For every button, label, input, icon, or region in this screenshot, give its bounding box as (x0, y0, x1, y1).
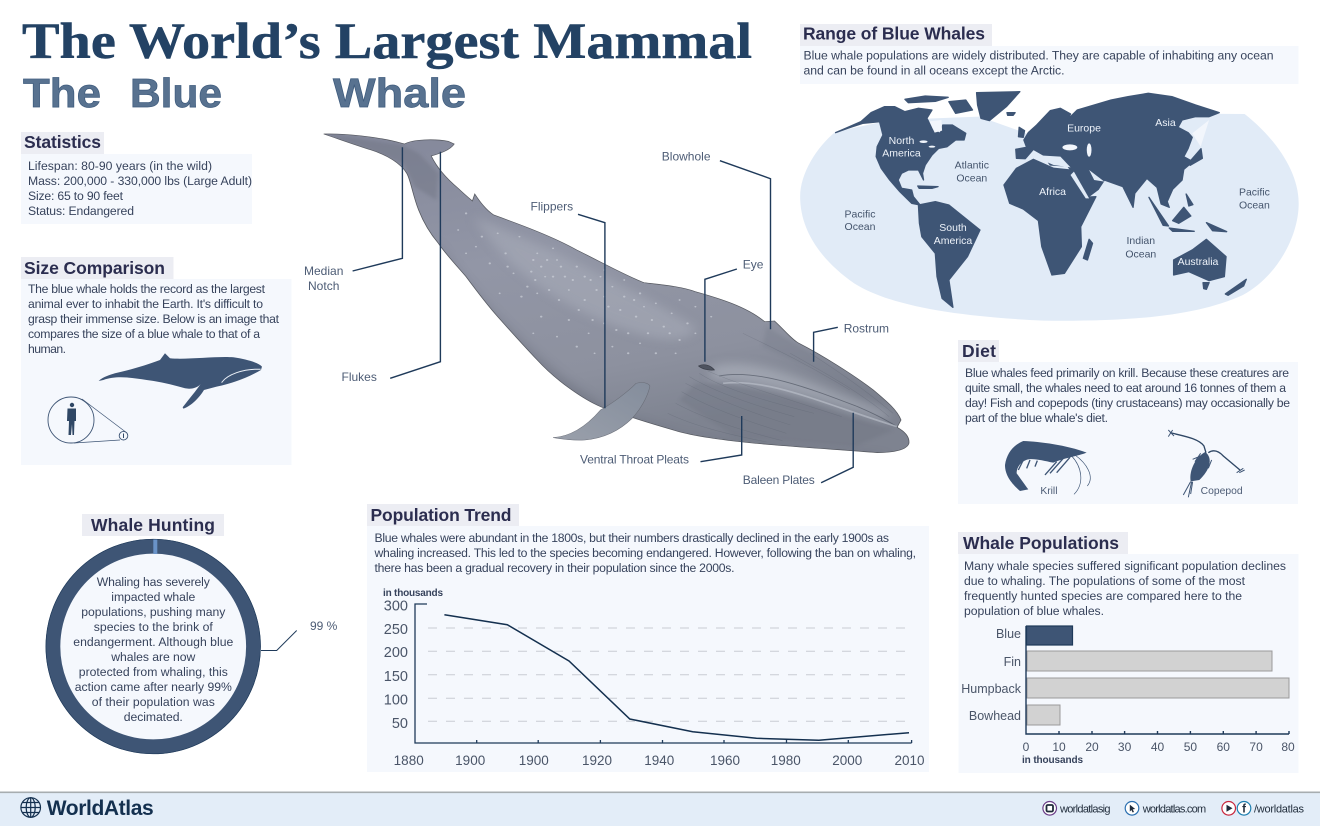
size comparison text: compares the size of a blue whale to that of a (28, 327, 260, 341)
whale hunting text: protected from whaling, this (79, 665, 228, 679)
label: blowhole: Blowhole (662, 150, 711, 164)
label: flippers: Flippers (530, 200, 573, 214)
heading: diet: Diet (962, 341, 996, 361)
map labels: Ocean (956, 174, 987, 185)
label: eye (705, 257, 764, 362)
panel: range of blue whales (800, 24, 1298, 84)
whale hunting text: whales are now (110, 650, 195, 664)
icon: human scale circle (48, 397, 128, 443)
whale hunting text: decimated. (124, 710, 183, 724)
footer (0, 792, 1320, 826)
icon: copepod (1168, 430, 1245, 497)
range text (804, 48, 1274, 78)
title: Whale (333, 70, 466, 116)
bar: humpback: Humpback (961, 682, 1022, 696)
heading: statistics: Statistics (24, 132, 101, 152)
diet text: part of the blue whale's diet. (965, 411, 1108, 425)
whale populations text (964, 559, 1286, 618)
map labels: Atlantic (955, 160, 989, 171)
map labels: South (939, 223, 967, 234)
whale hunting text: endangerment. Although blue (73, 635, 234, 649)
map labels: Pacific (1239, 188, 1270, 199)
social: instagram: worldatlasig (1059, 803, 1110, 815)
whale speckles (457, 212, 712, 354)
label: blowhole (662, 150, 770, 329)
size comparison text (28, 282, 280, 356)
label: flippers (530, 200, 605, 408)
bar chart axis labels: 30 (1118, 740, 1132, 754)
whale hunting text: impacted whale (111, 590, 196, 604)
icon: whale silhouette (99, 353, 262, 409)
x axis labels: 1940 (644, 753, 674, 768)
bar: fin: Fin (1004, 655, 1021, 669)
blue whale illustration (324, 134, 909, 460)
population line (444, 615, 909, 740)
map labels: America (934, 236, 972, 247)
map labels: Australia (1178, 257, 1219, 268)
label: baleen plates (743, 413, 853, 487)
bar chart axis labels: 0 (1023, 740, 1030, 754)
diet text: Blue whales feed primarily on krill. Because these creatures are (965, 366, 1289, 380)
label: baleen plates: Baleen Plates (743, 473, 815, 487)
x axis labels: 1900 (455, 753, 485, 768)
x axis labels: 1980 (771, 753, 801, 768)
y axis labels: 200 (384, 645, 408, 661)
x axis labels: 1920 (582, 753, 612, 768)
bar: bowhead: Bowhead (969, 709, 1021, 723)
title (22, 14, 752, 116)
whale hunting text: Whaling has severely (97, 575, 211, 589)
range text: and can be found in all oceans except the Arctic. (804, 64, 1064, 78)
bar chart axis labels: 80 (1281, 740, 1295, 754)
diet text (965, 366, 1290, 425)
logo: WorldAtlas: WorldAtlas (47, 797, 154, 820)
whale populations text: frequently hunted species are compared here to the (964, 589, 1242, 603)
range text: Blue whale populations are widely distributed. They are capable of inhabiting any ocean (804, 48, 1274, 62)
statistics list: Mass: 200,000 - 330,000 lbs (Large Adult) (28, 174, 252, 188)
bar: blue (996, 626, 1072, 645)
map labels: Africa (1039, 187, 1066, 198)
social: instagram (1043, 802, 1110, 815)
callout: 99 percent (261, 619, 338, 650)
statistics list (28, 159, 252, 218)
y axis labels (383, 588, 443, 732)
diet text: day! Fish and copepods (tiny crustaceans) may occasionally be (965, 396, 1290, 410)
whale pleats and mouth lines (668, 333, 898, 442)
y axis labels: 100 (384, 692, 408, 708)
ocean range (800, 113, 1299, 321)
bar chart axis labels: 20 (1085, 740, 1099, 754)
bar: fin (1004, 651, 1272, 671)
statistics list: Size: 65 to 90 feet (28, 189, 124, 203)
y axis labels: 150 (384, 669, 408, 685)
social: website (1125, 802, 1206, 815)
whale populations text: Many whale species suffered significant population declines (964, 559, 1286, 573)
bar chart: populations (961, 626, 1295, 766)
x axis labels: 1880 (394, 753, 424, 768)
icon: globe (21, 798, 40, 817)
population trend text (374, 531, 916, 575)
y axis labels: 250 (384, 622, 408, 638)
y axis labels: 300 (384, 598, 408, 614)
bar chart axis labels: 10 (1052, 740, 1066, 754)
diet text: quite small, the whales need to eat around 16 tonnes of them a (965, 381, 1286, 395)
size comparison text: human. (28, 342, 66, 356)
bar chart axis labels: 50 (1184, 740, 1197, 754)
bar: humpback (961, 678, 1289, 698)
population trend text: there has been a gradual recovery in their population since the 2000s. (374, 561, 734, 575)
land masses (836, 92, 1246, 307)
size comparison text: grasp their immense size. Below is an image that (28, 312, 280, 326)
callout: 99 percent: 99 % (310, 619, 338, 633)
whale flipper (553, 383, 650, 440)
map labels: Ocean (845, 222, 876, 233)
map inland water (919, 120, 1209, 198)
whale populations text: population of blue whales. (964, 604, 1104, 618)
map labels: Europe (1067, 124, 1101, 135)
social: youtube and facebook (1222, 802, 1304, 816)
copepod label: Copepod (1201, 486, 1243, 497)
heading: range: Range of Blue Whales (803, 24, 985, 44)
donut chart: 99 percent (46, 539, 260, 754)
size comparison text: The blue whale holds the record as the largest (28, 282, 266, 296)
world map (800, 92, 1299, 321)
bar: bowhead (969, 705, 1060, 725)
social: website: worldatlas.com (1142, 803, 1206, 815)
map labels: America (882, 149, 921, 160)
bar: blue: Blue (996, 627, 1021, 641)
y axis labels: 50 (392, 716, 408, 732)
social: youtube and facebook: /worldatlas (1254, 803, 1304, 815)
label: rostrum (814, 321, 889, 362)
label: rostrum: Rostrum (844, 321, 889, 335)
map labels: Ocean (1125, 249, 1156, 260)
bar chart axis labels: 60 (1217, 740, 1230, 754)
x axis labels (394, 753, 925, 768)
whale body (324, 134, 909, 460)
heading: whale populations: Whale Populations (963, 533, 1119, 553)
map labels (845, 118, 1270, 268)
y axis labels: in thousands (383, 588, 443, 599)
title: Blue (130, 70, 222, 116)
label: median notch (304, 147, 402, 293)
whale hunting text: populations, pushing many (81, 605, 226, 619)
heading: population trend: Population Trend (370, 505, 512, 525)
panel: whale hunting (46, 514, 338, 754)
x axis labels: 2010 (894, 753, 925, 768)
panel: diet (958, 340, 1298, 504)
map labels: Pacific (845, 209, 875, 220)
heading: size comparison: Size Comparison (24, 258, 165, 278)
population trend text: whaling increased. This led to the species becoming endangered. However, following the ban on whaling, (374, 546, 916, 560)
icon: krill (1005, 441, 1090, 497)
line chart: population trend (383, 588, 925, 768)
panel: size comparison (21, 257, 292, 465)
whale hunting text (73, 575, 234, 724)
size comparison text: animal ever to inhabit the Earth. It's difficult to (28, 297, 263, 311)
statistics list: Status: Endangered (28, 204, 134, 218)
heading: whale hunting: Whale Hunting (91, 515, 215, 535)
x axis labels: 1960 (710, 753, 740, 768)
population trend text: Blue whales were abundant in the 1800s, but their numbers drastically declined in the early 1900s as (374, 531, 889, 545)
panel: whale populations (958, 532, 1298, 773)
bar chart axis labels: in thousands (1022, 755, 1083, 766)
whale hunting text: of their population was (92, 695, 215, 709)
krill label: Krill (1040, 486, 1058, 497)
map labels: Asia (1155, 118, 1176, 129)
label: eye: Eye (743, 257, 764, 271)
bar chart axis labels (1022, 740, 1295, 766)
label: ventral throat pleats: Ventral Throat Pleats (580, 453, 689, 467)
whale hunting text: action came after nearly 99% (75, 680, 232, 694)
map labels: Ocean (1239, 200, 1270, 211)
statistics list: Lifespan: 80-90 years (in the wild) (28, 159, 212, 173)
label: ventral throat pleats (580, 416, 742, 467)
bar chart axis labels: 70 (1249, 740, 1263, 754)
label: flukes: Flukes (342, 370, 377, 384)
map labels: North (889, 136, 914, 147)
whale populations text: due to whaling. The populations of some of the most (964, 574, 1246, 588)
whale hunting text: species to the brink of (94, 620, 213, 634)
social: youtube and facebook: f (1242, 804, 1246, 816)
label: median notch: Median (304, 264, 343, 278)
title: The World’s Largest Mammal (22, 14, 752, 70)
label: median notch: Notch (308, 279, 339, 293)
title: The (23, 70, 101, 116)
label: flukes (342, 152, 440, 384)
panel: statistics (21, 132, 252, 224)
x axis labels: 2000 (832, 753, 862, 768)
bar chart axis labels: 40 (1151, 740, 1164, 754)
x axis labels: 1900 (519, 753, 549, 768)
map labels: Indian (1127, 236, 1155, 247)
panel: population trend (367, 504, 929, 772)
